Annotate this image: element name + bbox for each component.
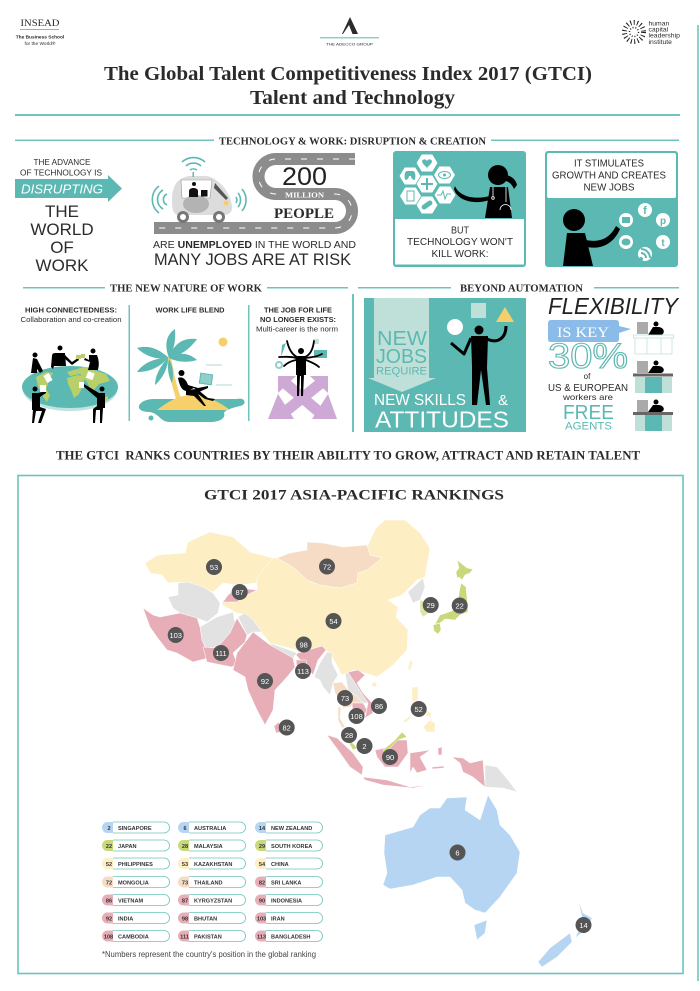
heading: map title: GTCI 2017 ASIA-PACIFIC RANKINGS bbox=[204, 488, 504, 504]
legend: country rankings: JAPAN bbox=[118, 844, 137, 850]
legend: country rankings: 73 bbox=[182, 880, 188, 886]
logo: INSEAD: INSEAD bbox=[20, 19, 60, 29]
map markers: rank numbers: 92 bbox=[261, 677, 269, 686]
panel: flexibility is key: US & EUROPEAN bbox=[548, 383, 628, 394]
map markers: rank numbers: 87 bbox=[236, 588, 244, 597]
panel: new jobs require new skills and attitudes: NEW SKILLS bbox=[374, 392, 466, 409]
map markers: rank numbers: 86 bbox=[375, 702, 383, 711]
map markers: rank numbers: 82 bbox=[283, 723, 291, 732]
panel: flexibility is key: FLEXIBILITY bbox=[548, 293, 680, 319]
title: Talent and Technology bbox=[250, 88, 455, 109]
icon: person with social bubbles: p bbox=[660, 216, 666, 227]
icon: palm tree island bbox=[137, 329, 245, 422]
legend: country rankings: MONGOLIA bbox=[118, 880, 149, 886]
map markers: rank numbers: 28 bbox=[345, 731, 353, 740]
panel: advance of technology disrupting: WORLD bbox=[30, 220, 94, 239]
map markers: rank numbers: 54 bbox=[329, 617, 338, 626]
panel: 200 million people road and car: ARE UNEMPLOYED IN THE WORLD AND bbox=[153, 239, 356, 251]
panel: advance of technology disrupting: THE bbox=[45, 202, 79, 221]
legend: country rankings: PAKISTAN bbox=[194, 934, 222, 940]
panel: technology won't kill work: BUT bbox=[451, 226, 469, 236]
legend: country rankings: 54 bbox=[259, 862, 266, 868]
legend: country rankings: KYRGYZSTAN bbox=[194, 898, 232, 904]
panel: new jobs require new skills and attitudes: & bbox=[498, 392, 508, 409]
legend: country rankings: MALAYSIA bbox=[194, 844, 223, 850]
panel: the job for life bbox=[256, 308, 338, 419]
statistic: 200 million people: 200 bbox=[282, 163, 327, 191]
map markers: rank numbers: 53 bbox=[210, 563, 218, 572]
map markers: rank numbers: 2 bbox=[362, 742, 367, 751]
map markers: rank numbers: 108 bbox=[350, 712, 363, 721]
map markers: rank numbers: 90 bbox=[386, 753, 394, 762]
panel: new jobs require new skills and attitudes: ATTITUDES bbox=[375, 406, 509, 432]
legend: country rankings: SRI LANKA bbox=[271, 880, 301, 886]
panel: flexibility is key bbox=[548, 293, 680, 432]
heading: GTCI ranks countries: THE GTCI RANKS COUNTRIES BY THEIR ABILITY TO GROW, ATTRACT AND RETAIN TALENT bbox=[56, 448, 640, 462]
panel: map frame bbox=[18, 476, 683, 974]
map markers: rank numbers bbox=[168, 558, 591, 933]
icon: winding road bbox=[154, 159, 355, 228]
logo: The Adecco Group: THE ADECCO GROUP bbox=[326, 42, 373, 46]
legend: country rankings: 28 bbox=[182, 844, 188, 850]
panel: high connectedness bbox=[20, 308, 122, 423]
panel: flexibility is key: IS KEY bbox=[557, 325, 609, 341]
map markers: rank numbers: 29 bbox=[427, 601, 435, 610]
icon: person with social bubbles: f bbox=[643, 205, 647, 217]
legend: country rankings: 52 bbox=[106, 862, 112, 868]
legend: country rankings: 82 bbox=[259, 880, 265, 886]
statistic: 200 million people: MILLION bbox=[285, 190, 325, 200]
legend: country rankings: 92 bbox=[106, 916, 112, 922]
legend: country rankings: BANGLADESH bbox=[271, 934, 310, 940]
legend: country rankings: INDIA bbox=[118, 916, 133, 922]
panel: high connectedness: Collaboration and co-creation bbox=[20, 317, 122, 324]
arrow: downwards bbox=[368, 298, 436, 392]
icon: multi-armed figure on crossing arrows bbox=[268, 339, 337, 419]
panel: stimulates growth: NEW JOBS bbox=[584, 182, 635, 194]
map markers: rank numbers: 98 bbox=[300, 640, 308, 649]
panel: advance of technology disrupting: THE ADVANCE bbox=[34, 157, 91, 167]
panel: work life blend: WORK LIFE BLEND bbox=[156, 308, 224, 314]
map markers: rank numbers: 73 bbox=[341, 694, 349, 703]
legend: country rankings: 90 bbox=[259, 898, 265, 904]
legend: country rankings: SINGAPORE bbox=[118, 826, 152, 832]
icon: self-driving car bbox=[152, 158, 246, 223]
callout: is key bbox=[548, 320, 631, 342]
legend: country rankings: KAZAKHSTAN bbox=[194, 862, 232, 868]
heading: technology and work: TECHNOLOGY & WORK: DISRUPTION & CREATION bbox=[219, 136, 486, 148]
arrow: disrupting bbox=[15, 175, 122, 202]
panel: stimulates growth: GROWTH AND CREATES bbox=[552, 170, 666, 182]
map markers: rank numbers: 72 bbox=[323, 562, 331, 571]
panel: technology won't kill work: KILL WORK: bbox=[432, 249, 488, 260]
legend: country rankings: PHILIPPINES bbox=[118, 862, 153, 868]
heading: beyond automation: BEYOND AUTOMATION bbox=[460, 284, 584, 294]
legend: country rankings: 108 bbox=[104, 934, 113, 940]
legend: country rankings bbox=[102, 822, 322, 942]
panel: advance of technology disrupting: DISRUPTING bbox=[21, 182, 103, 196]
statistic: 30 percent: 30% bbox=[548, 337, 628, 376]
legend: country rankings: BHUTAN bbox=[194, 916, 217, 922]
icon: medical hexagons bbox=[400, 154, 456, 214]
legend: country rankings: 113 bbox=[257, 934, 266, 940]
statistic: 200 million people: PEOPLE bbox=[274, 206, 334, 222]
panel: technology won't kill work: TECHNOLOGY WON'T bbox=[407, 237, 513, 248]
panel: new jobs require new skills and attitudes: NEW bbox=[377, 328, 427, 350]
legend: country rankings: INDONESIA bbox=[271, 898, 302, 904]
panel: flexibility is key: AGENTS bbox=[565, 420, 612, 432]
icon: doctor bbox=[454, 165, 517, 218]
icon: desk with worker bbox=[633, 360, 673, 393]
panel: advance of technology disrupting: WORK bbox=[36, 256, 89, 275]
map markers: rank numbers: 6 bbox=[455, 848, 460, 857]
panel: new jobs require new skills and attitudes bbox=[364, 298, 526, 432]
legend: country rankings: 2 bbox=[107, 826, 111, 832]
panel: stimulates growth: IT STIMULATES bbox=[574, 158, 644, 170]
map markers: rank numbers: 52 bbox=[415, 705, 423, 714]
panel: flexibility is key: FREE bbox=[563, 402, 614, 424]
logo: human capital leadership institute: leadership bbox=[648, 32, 680, 40]
legend: country rankings: CHINA bbox=[271, 862, 289, 868]
panel: 200 million people road and car: MANY JOBS ARE AT RISK bbox=[154, 250, 352, 269]
panel: high connectedness: HIGH CONNECTEDNESS: bbox=[25, 308, 117, 314]
map markers: rank numbers: 103 bbox=[169, 631, 182, 640]
legend: country rankings: 22 bbox=[106, 844, 112, 850]
legend: country rankings: 53 bbox=[182, 862, 188, 868]
icon: globe table with people bbox=[22, 346, 118, 423]
panel: technology won't kill work bbox=[393, 151, 526, 267]
title: The Global Talent Competitiveness Index 2017 (GTCI) bbox=[104, 64, 592, 85]
legend: country rankings: IRAN bbox=[271, 916, 285, 922]
legend: country rankings: SOUTH KOREA bbox=[271, 844, 312, 850]
panel: work life blend bbox=[137, 308, 245, 422]
logo: INSEAD: The Business School bbox=[16, 34, 64, 40]
legend: country rankings: 103 bbox=[257, 916, 266, 922]
legend: country rankings: 6 bbox=[183, 826, 187, 832]
legend: country rankings: CAMBODIA bbox=[118, 934, 149, 940]
icon: person with social bubbles: t bbox=[661, 238, 665, 249]
legend: country rankings: 87 bbox=[182, 898, 188, 904]
legend: country rankings: 72 bbox=[106, 880, 112, 886]
map markers: rank numbers: 22 bbox=[456, 601, 464, 610]
logo: human capital leadership institute: institute bbox=[648, 39, 672, 46]
panel: flexibility is key: workers are bbox=[562, 392, 613, 402]
panel: new jobs require new skills and attitudes: JOBS bbox=[376, 346, 427, 368]
panel: the job for life: NO LONGER EXISTS: bbox=[260, 317, 336, 324]
panel: advance of technology disrupting: OF bbox=[50, 238, 74, 257]
logo: INSEAD: for the World® bbox=[25, 40, 56, 47]
legend: country rankings: 86 bbox=[106, 898, 112, 904]
heading: the new nature of work: THE NEW NATURE OF WORK bbox=[110, 284, 263, 294]
icon: juggling figure bbox=[447, 303, 514, 405]
map: Asia-Pacific countries bbox=[143, 520, 592, 967]
panel: 200 million people road and car bbox=[152, 158, 356, 269]
panel: flexibility is key: of bbox=[584, 372, 591, 381]
logo: INSEAD bbox=[16, 19, 64, 47]
icon: person with social bubbles bbox=[563, 203, 670, 266]
icon: desk with worker bbox=[633, 400, 673, 431]
map markers: rank numbers: 113 bbox=[297, 667, 309, 676]
legend: country rankings: 98 bbox=[182, 916, 188, 922]
legend: country rankings: NEW ZEALAND bbox=[271, 826, 312, 832]
legend: country rankings: THAILAND bbox=[194, 880, 223, 886]
logo: human capital leadership institute: human bbox=[648, 20, 670, 28]
legend: country rankings: AUSTRALIA bbox=[194, 826, 226, 832]
title bbox=[104, 64, 592, 109]
statistic: 200 million people bbox=[274, 163, 334, 222]
legend: country rankings: VIETNAM bbox=[118, 898, 144, 904]
panel: the job for life: THE JOB FOR LIFE bbox=[264, 308, 332, 314]
panel: advance of technology disrupting: OF TECHNOLOGY IS bbox=[20, 168, 102, 178]
legend: country rankings: 29 bbox=[259, 844, 265, 850]
panel: the job for life: Multi-career is the norm bbox=[256, 326, 338, 334]
logo: human capital leadership institute: capital bbox=[648, 26, 669, 34]
legend: country rankings: 111 bbox=[180, 934, 189, 940]
panel: stimulates growth bbox=[545, 151, 678, 267]
panel: new jobs require new skills and attitudes: REQUIRE bbox=[376, 366, 427, 378]
logo: The Adecco Group bbox=[320, 17, 379, 46]
map markers: rank numbers: 111 bbox=[215, 649, 227, 658]
panel: advance of technology disrupting bbox=[15, 157, 122, 275]
footnote: *Numbers represent the country's position in the global ranking bbox=[102, 950, 316, 959]
map markers: rank numbers: 14 bbox=[579, 921, 588, 930]
legend: country rankings: 14 bbox=[259, 826, 266, 832]
icon: empty desk bbox=[634, 322, 674, 354]
logo: human capital leadership institute bbox=[624, 20, 680, 46]
